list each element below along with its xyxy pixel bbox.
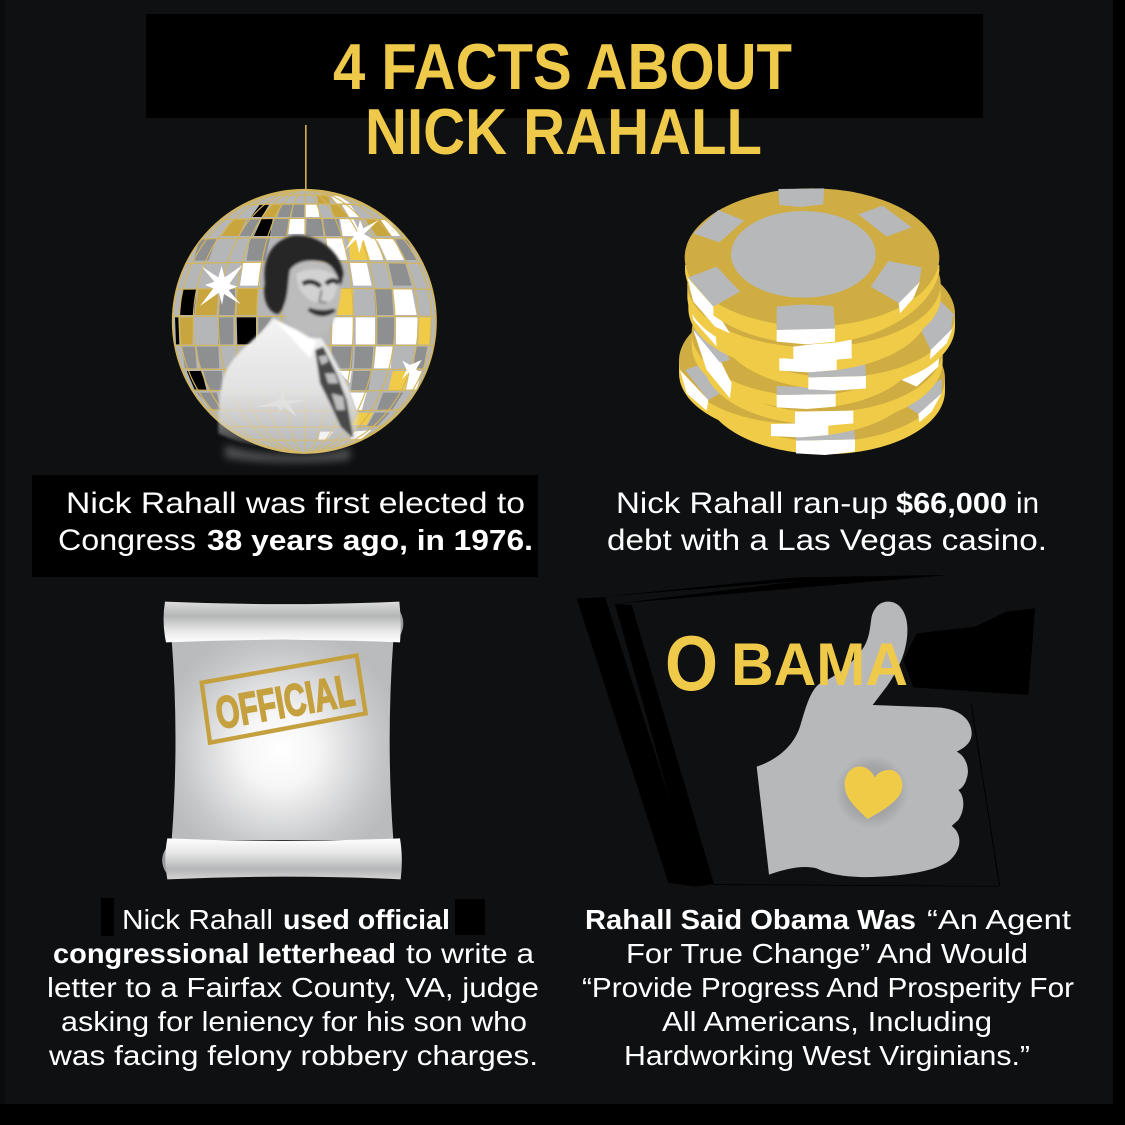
panel: Obama caption: All Americans, Including <box>662 1006 992 1037</box>
ball grid lines <box>170 187 439 457</box>
panel: casino caption: Nick Rahall ran-up <box>616 487 888 520</box>
panel: casino caption <box>607 487 1047 557</box>
panel: Obama caption: “Provide Progress And Prosperity For <box>582 972 1074 1003</box>
title: 4 FACTS ABOUT <box>333 30 792 103</box>
panel: Obama caption: Rahall Said Obama Was <box>585 904 916 935</box>
icon: official scroll <box>162 602 403 879</box>
chip b715 <box>692 269 920 409</box>
panel: letterhead caption: congressional letterhead <box>53 938 396 969</box>
panel: Obama caption: For True Change” And Would <box>626 938 1028 969</box>
portrait of Nick Rahall <box>218 235 358 449</box>
panel: elected caption: Nick Rahall was first elected to <box>66 487 525 520</box>
panel: letterhead caption: to write a <box>406 938 534 969</box>
icon: Obama book with thumbs up <box>577 575 1035 887</box>
ball tiles <box>175 195 431 440</box>
panel: elected caption <box>32 475 538 577</box>
heart <box>845 767 902 819</box>
icon: casino chips <box>679 188 955 455</box>
panel: letterhead caption: was facing felony robbery charges. <box>48 1040 538 1071</box>
icon: Obama book with thumbs up: BAMA <box>731 631 908 698</box>
panel: casino caption: $66,000 <box>896 488 1007 520</box>
sparkles <box>200 220 422 417</box>
chip top <box>685 188 939 344</box>
panel: Obama caption: Hardworking West Virginians.” <box>624 1040 1030 1071</box>
stamp <box>202 655 366 743</box>
panel: letterhead caption: letter to a Fairfax County, VA, judge <box>47 972 539 1003</box>
panel: Obama caption <box>582 904 1074 1071</box>
chip b765 <box>703 286 943 426</box>
panel: casino caption: debt with a Las Vegas casino. <box>607 524 1047 557</box>
chip b853 <box>705 315 945 455</box>
panel: letterhead caption: Nick Rahall <box>122 904 273 935</box>
panel: elected caption: Congress <box>58 524 196 557</box>
title: NICK RAHALL <box>365 95 762 168</box>
panel: casino caption: in <box>1016 487 1039 520</box>
portrait glow <box>225 445 350 462</box>
icon: disco ball with portrait <box>170 125 439 462</box>
chip b570 <box>687 221 941 361</box>
panel: letterhead caption <box>47 898 539 1071</box>
panel: letterhead caption: asking for leniency for his son who <box>61 1006 527 1037</box>
icon: Obama book with thumbs up: O <box>665 619 718 707</box>
panel: elected caption: 38 years ago, in 1976. <box>207 525 533 557</box>
book shapes <box>577 575 1035 887</box>
chip b605 <box>688 232 930 372</box>
title <box>146 14 983 168</box>
stamp: OFFICIAL <box>212 664 358 739</box>
panel: letterhead caption: used official <box>283 904 450 935</box>
thumb <box>757 602 972 877</box>
panel: Obama caption: “An Agent <box>927 904 1071 935</box>
chip b800 <box>679 297 921 437</box>
chip b660 <box>718 251 955 391</box>
